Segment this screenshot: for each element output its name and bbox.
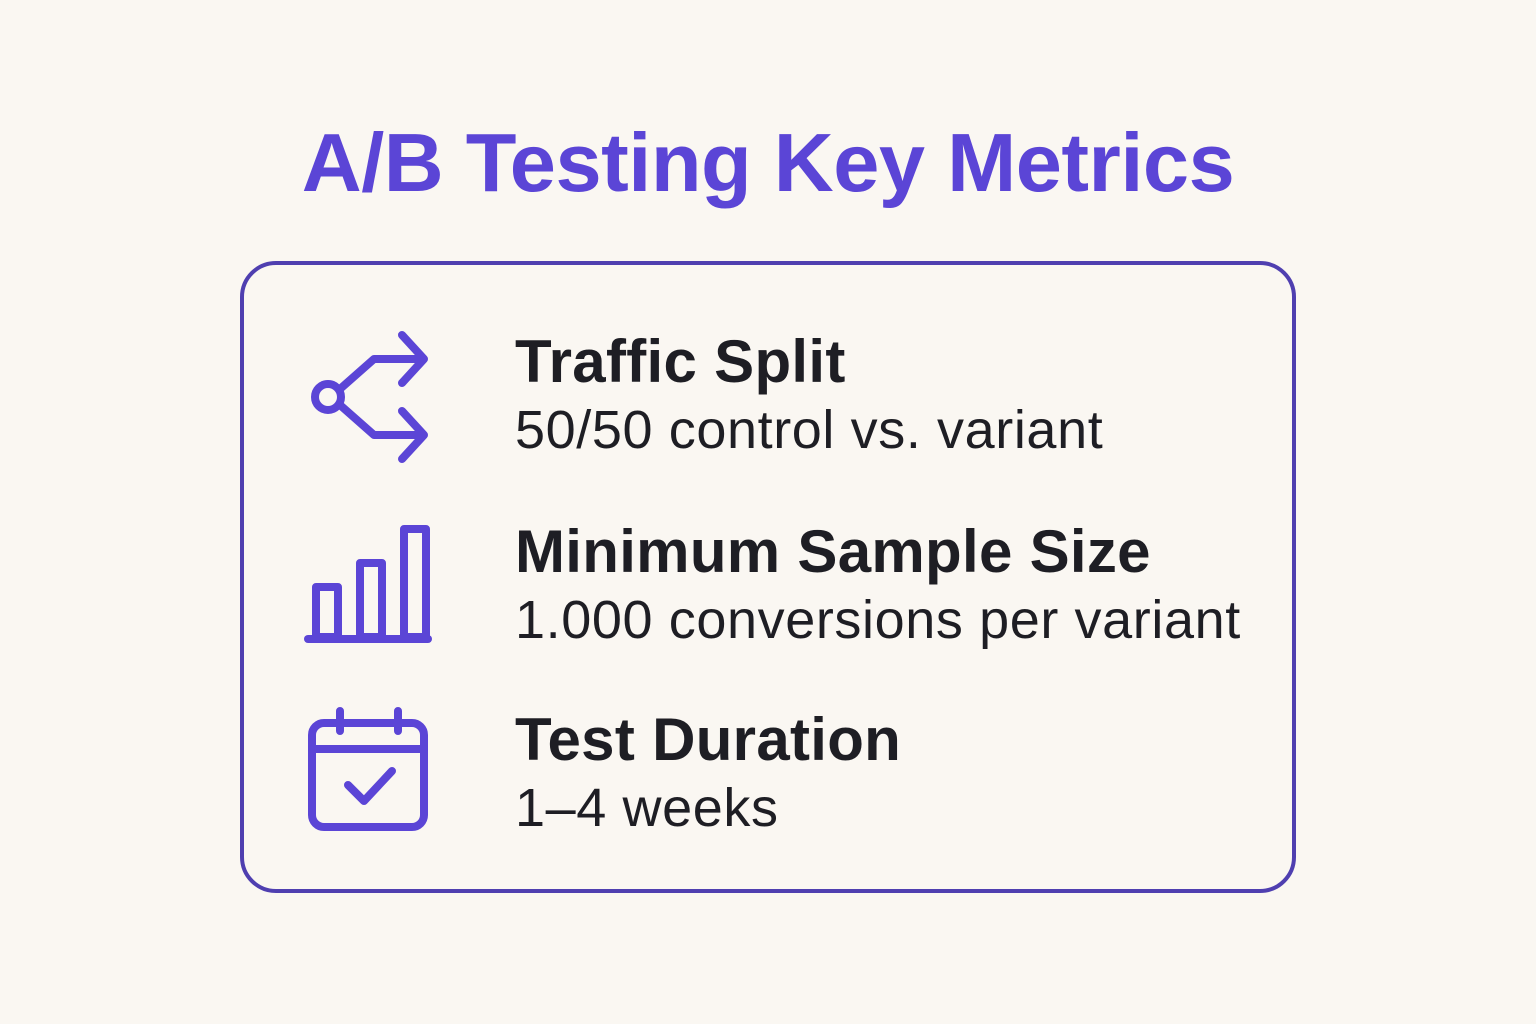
text: traffic split: 50/50 control vs. variant [515,400,1103,460]
text: sample size: 1.000 conversions per variant [515,590,1241,650]
text: traffic split: Traffic Split [515,328,846,395]
panel: metrics [240,261,1296,893]
icon: split arrows [311,331,428,463]
row: minimum sample size [304,518,1241,650]
text: duration: 1–4 weeks [515,778,779,838]
row: test duration [308,706,901,838]
icon: calendar check [308,707,428,831]
text: sample size [515,518,1241,650]
text: traffic split [515,328,1103,460]
icon: bar chart [304,525,432,643]
text: sample size: Minimum Sample Size [515,518,1151,585]
title: A/B Testing Key Metrics [302,116,1234,209]
text: duration [515,706,901,838]
row: traffic split [311,328,1103,463]
text: duration: Test Duration [515,706,901,773]
